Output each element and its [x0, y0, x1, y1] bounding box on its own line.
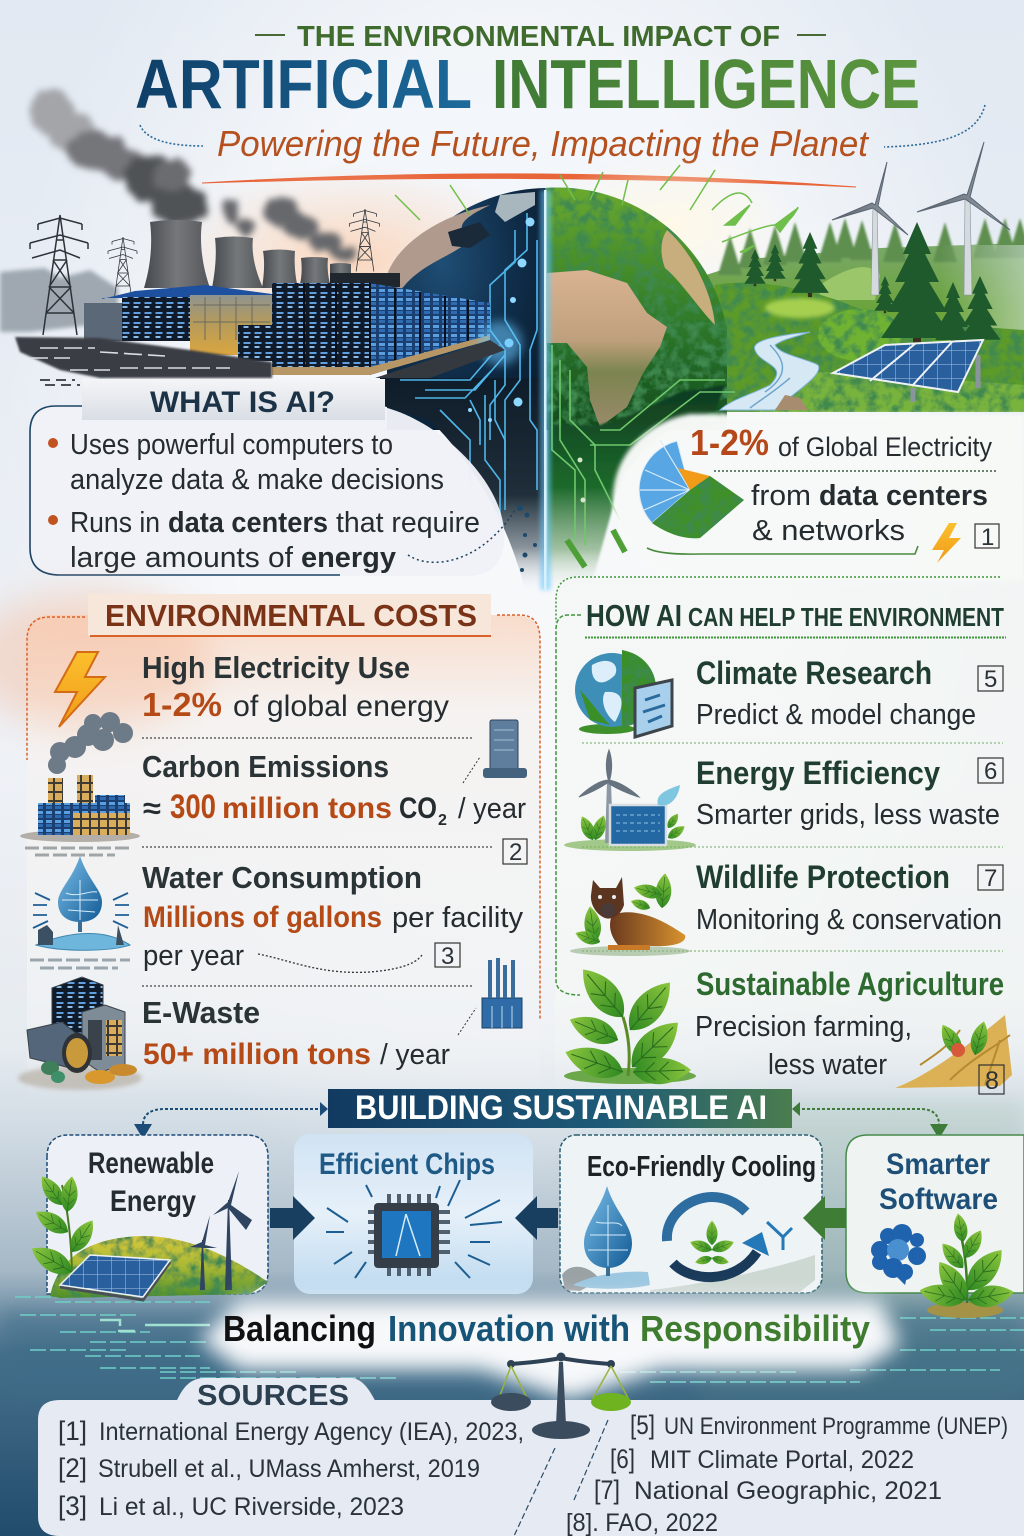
lower circuit ground: [380, 378, 725, 590]
wind turbines: [832, 142, 1010, 295]
cost: e-waste: 50+ million tons: [143, 1038, 371, 1071]
cost: e-waste: E-Waste: [142, 995, 260, 1030]
title main: INTELLIGENCE: [492, 45, 920, 123]
title main: [135, 45, 920, 123]
citation 3: 3: [441, 943, 454, 970]
cost: carbon: CO: [399, 792, 437, 825]
icon: globe and tablet: [575, 650, 672, 737]
cooling towers: [144, 220, 351, 288]
bullet 1: Uses powerful computers to: [70, 429, 393, 461]
tagline: Innovation with: [388, 1308, 630, 1349]
cost: carbon: 300: [170, 788, 216, 826]
panel: what is AI: [30, 379, 537, 576]
title kicker: THE ENVIRONMENTAL IMPACT OF: [297, 21, 780, 53]
globe land: Africa: [547, 270, 667, 427]
cost: water: Millions of gallons: [143, 901, 382, 934]
right references: MIT Climate Portal, 2022: [650, 1446, 914, 1474]
tab heading: WHAT IS AI?: [150, 386, 335, 419]
illustration: plant: [917, 1212, 1016, 1318]
citation 1: [975, 524, 999, 551]
card: renewable energy: Renewable: [88, 1147, 214, 1180]
cost: water: per facility: [392, 902, 523, 934]
heading: ENVIRONMENTAL COSTS: [105, 598, 477, 633]
left references: [3]: [58, 1491, 87, 1521]
subtitle: [140, 105, 985, 187]
icon: water drop: [30, 856, 130, 968]
help: agriculture: Precision farming,: [695, 1011, 912, 1043]
tab heading: [82, 379, 385, 420]
illustration: turbines: [190, 1171, 252, 1290]
mountains: [0, 268, 118, 332]
globe land: crescent: [661, 230, 715, 325]
help: energy efficiency: Smarter grids, less waste: [696, 799, 1000, 831]
power pylons: [30, 209, 380, 335]
bullet 2: energy: [301, 542, 396, 574]
tagline: Balancing: [223, 1308, 376, 1349]
globe: [387, 188, 727, 430]
wind-blown leaves: [395, 165, 798, 252]
title block: [135, 21, 985, 187]
card: renewable energy: [27, 1135, 268, 1300]
help: energy efficiency: Energy Efficiency: [696, 755, 940, 791]
tab heading: SOURCES: [197, 1380, 349, 1412]
cost: water: [30, 856, 523, 972]
heading: [585, 598, 1006, 638]
stat text: [690, 422, 997, 547]
card: smarter software: Smarter: [886, 1148, 990, 1181]
help: energy efficiency: 6: [984, 758, 997, 785]
help: climate research: [575, 650, 1003, 737]
left references: [2]: [58, 1453, 87, 1483]
arrow: banner to software: [792, 1102, 948, 1139]
data center buildings: [84, 273, 522, 375]
left references: International Energy Agency (IEA), 2023,: [99, 1418, 524, 1446]
illustration: chip: [326, 1180, 502, 1278]
bullet 2: data centers: [168, 507, 328, 539]
arrow: software to cooling: [803, 1196, 846, 1240]
stat text: 1-2%: [690, 422, 769, 463]
bullet 1: [48, 429, 444, 496]
help: wildlife: Wildlife Protection: [696, 859, 950, 895]
cost: carbon: million tons: [222, 792, 392, 825]
tab heading: [172, 1378, 380, 1412]
illustration: recycling arrows: [667, 1197, 792, 1277]
illustration: rocks and pool: [562, 1255, 815, 1292]
illustration: hill: [50, 1236, 268, 1298]
hero illustration: [0, 88, 1024, 590]
panel: how AI can help: [555, 577, 1024, 1100]
cost: electricity: of global energy: [233, 690, 449, 723]
help: climate research: Predict & model change: [696, 699, 976, 731]
cost: water: Water Consumption: [142, 860, 422, 895]
cost: electricity: High Electricity Use: [142, 650, 410, 685]
circuit nodes: [468, 218, 586, 502]
card: efficient chips: [294, 1134, 533, 1294]
left references: Li et al., UC Riverside, 2023: [99, 1493, 404, 1521]
icon: lightning bolt: [55, 652, 105, 727]
help: agriculture: less water: [768, 1049, 887, 1081]
ground: [15, 337, 272, 385]
right references: [7]: [594, 1475, 620, 1505]
pie chart: [639, 440, 744, 538]
arrow: banner to renewable: [134, 1102, 328, 1139]
card: efficient chips: Efficient Chips: [319, 1148, 495, 1181]
green circuit ends: [567, 530, 625, 567]
cost: carbon: / year: [458, 793, 526, 825]
banner: building sustainable AI: BUILDING SUSTAINABLE AI: [355, 1089, 767, 1127]
left references: [1]: [58, 1416, 87, 1446]
stat text: & networks: [752, 515, 905, 547]
road: [375, 340, 505, 378]
title main: ARTIFICIAL: [135, 45, 472, 123]
cost: electricity: 1-2%: [142, 686, 222, 723]
icon: small building: [458, 958, 522, 1035]
arrow: cooling to chips: [515, 1196, 558, 1240]
right references: National Geographic, 2021: [634, 1477, 942, 1505]
right references: [566, 1410, 1008, 1536]
icon: e-waste pile: [18, 977, 142, 1090]
stat text: data centers: [819, 480, 988, 512]
help: wildlife: 7: [984, 865, 997, 892]
landscape: [690, 218, 1024, 412]
illustration: blue cluster: [871, 1224, 926, 1285]
heading: HOW AI: [586, 598, 682, 633]
cost: carbon: 2: [438, 812, 447, 829]
panel: electricity stat: [613, 414, 1024, 582]
circuit traces: [400, 213, 735, 545]
cost: carbon: [20, 712, 526, 855]
icon: balance scales: [491, 1352, 631, 1439]
cost: water: per year: [143, 940, 244, 972]
icon: server: [463, 720, 527, 783]
citation 2: [503, 839, 527, 866]
stat text: of Global Electricity: [778, 432, 992, 462]
water band: [0, 1297, 1024, 1400]
illustration: water drop: [584, 1186, 632, 1276]
icon: factory: [20, 712, 140, 855]
right references: [5]: [630, 1410, 655, 1440]
stat text: from: [751, 480, 811, 512]
card: smarter software: [846, 1135, 1024, 1318]
card: renewable energy: Energy: [110, 1185, 196, 1218]
help: wildlife: [570, 859, 1003, 956]
solar panel: [833, 340, 983, 402]
bullet 2: large amounts of: [70, 542, 294, 574]
subtitle: Powering the Future, Impacting the Planet: [217, 123, 870, 164]
card: eco-friendly cooling: [560, 1135, 822, 1293]
help: climate research: Climate Research: [696, 655, 932, 691]
right references: [6]: [610, 1444, 635, 1474]
cost: e-waste: [18, 977, 450, 1090]
illustration: seedling: [688, 1221, 736, 1266]
help: climate research: 5: [984, 666, 997, 693]
left references: Strubell et al., UMass Amherst, 2019: [98, 1455, 480, 1483]
card: eco-friendly cooling: Eco-Friendly Cooling: [587, 1151, 816, 1183]
smoke plumes: [30, 88, 355, 261]
cost: carbon: ≈: [143, 793, 161, 825]
central light beam: [540, 190, 551, 590]
cost: electricity: [55, 650, 449, 727]
cost: carbon: Carbon Emissions: [142, 749, 389, 784]
help: agriculture: 8: [985, 1067, 999, 1095]
help: energy efficiency: [564, 750, 1003, 851]
left references: [58, 1416, 524, 1521]
tagline: [200, 1300, 900, 1400]
illustration: plants: [27, 1172, 109, 1281]
bullet 2: Runs in: [70, 507, 160, 539]
citation 2: 2: [509, 839, 522, 866]
help: wildlife: Monitoring & conservation: [696, 904, 1002, 936]
icon: bolt: [932, 523, 961, 563]
card: smarter software: Software: [879, 1183, 998, 1216]
sky glow: [160, 155, 800, 355]
icon: wheat field: [895, 1015, 1012, 1088]
help: agriculture: [561, 960, 1012, 1095]
illustration: solar panel: [60, 1255, 170, 1300]
citation 1: 1: [981, 524, 994, 551]
citation 3: [435, 943, 460, 970]
cost: e-waste: / year: [380, 1039, 450, 1071]
icon: turbine and monitor: [564, 750, 696, 851]
panel: sources: [38, 1378, 1024, 1536]
river: [720, 332, 819, 410]
panel: environmental costs: [0, 590, 540, 1100]
tagline: Responsibility: [640, 1308, 870, 1349]
bullet 1: analyze data & make decisions: [70, 464, 444, 496]
icon: plant: [561, 960, 696, 1085]
icon: animal with leaves: [570, 873, 690, 956]
bullet 2: that require: [336, 507, 480, 539]
bullet 2: [48, 507, 480, 574]
arrow: renewable to chips: [270, 1196, 315, 1240]
